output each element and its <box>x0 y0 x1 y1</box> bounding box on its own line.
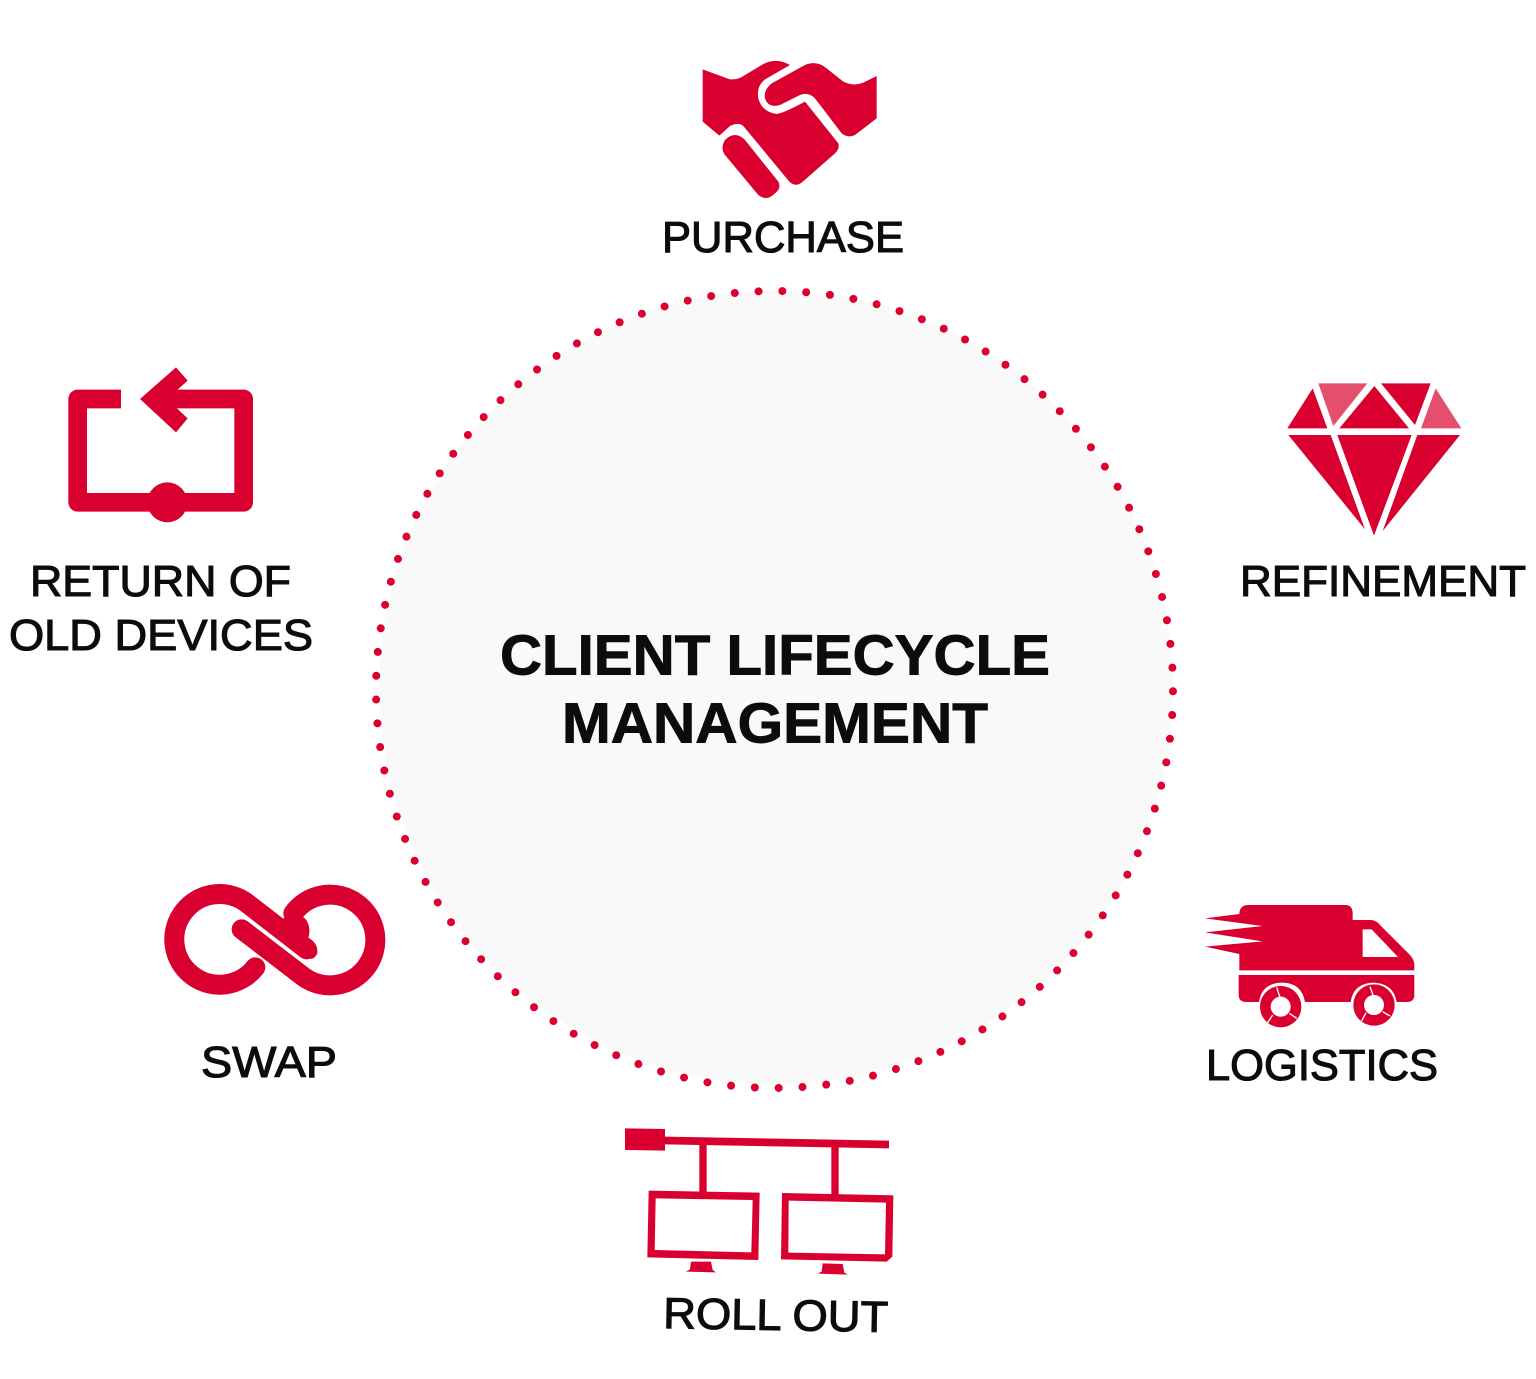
icon: network of monitors <box>625 1128 893 1275</box>
label: swap: SWAP <box>201 1039 337 1087</box>
label: roll out: ROLL OUT <box>663 1290 889 1342</box>
icon: diamond <box>1287 383 1461 536</box>
title: CLIENT LIFECYCLE <box>500 624 1050 688</box>
icon: handshake <box>703 61 877 198</box>
title <box>500 624 1050 756</box>
label: logistics: LOGISTICS <box>1206 1042 1438 1090</box>
label: return of old devices: OLD DEVICES <box>9 612 313 660</box>
icon: delivery truck <box>1205 905 1414 1023</box>
label: return of old devices <box>9 558 313 660</box>
icon: return arrow loop <box>78 367 244 522</box>
label: refinement: REFINEMENT <box>1240 558 1526 606</box>
title: MANAGEMENT <box>562 692 988 756</box>
central circle <box>376 290 1173 1088</box>
icon: swap infinity loop <box>174 894 375 985</box>
label: return of old devices: RETURN OF <box>30 558 291 606</box>
label: purchase: PURCHASE <box>662 214 904 262</box>
